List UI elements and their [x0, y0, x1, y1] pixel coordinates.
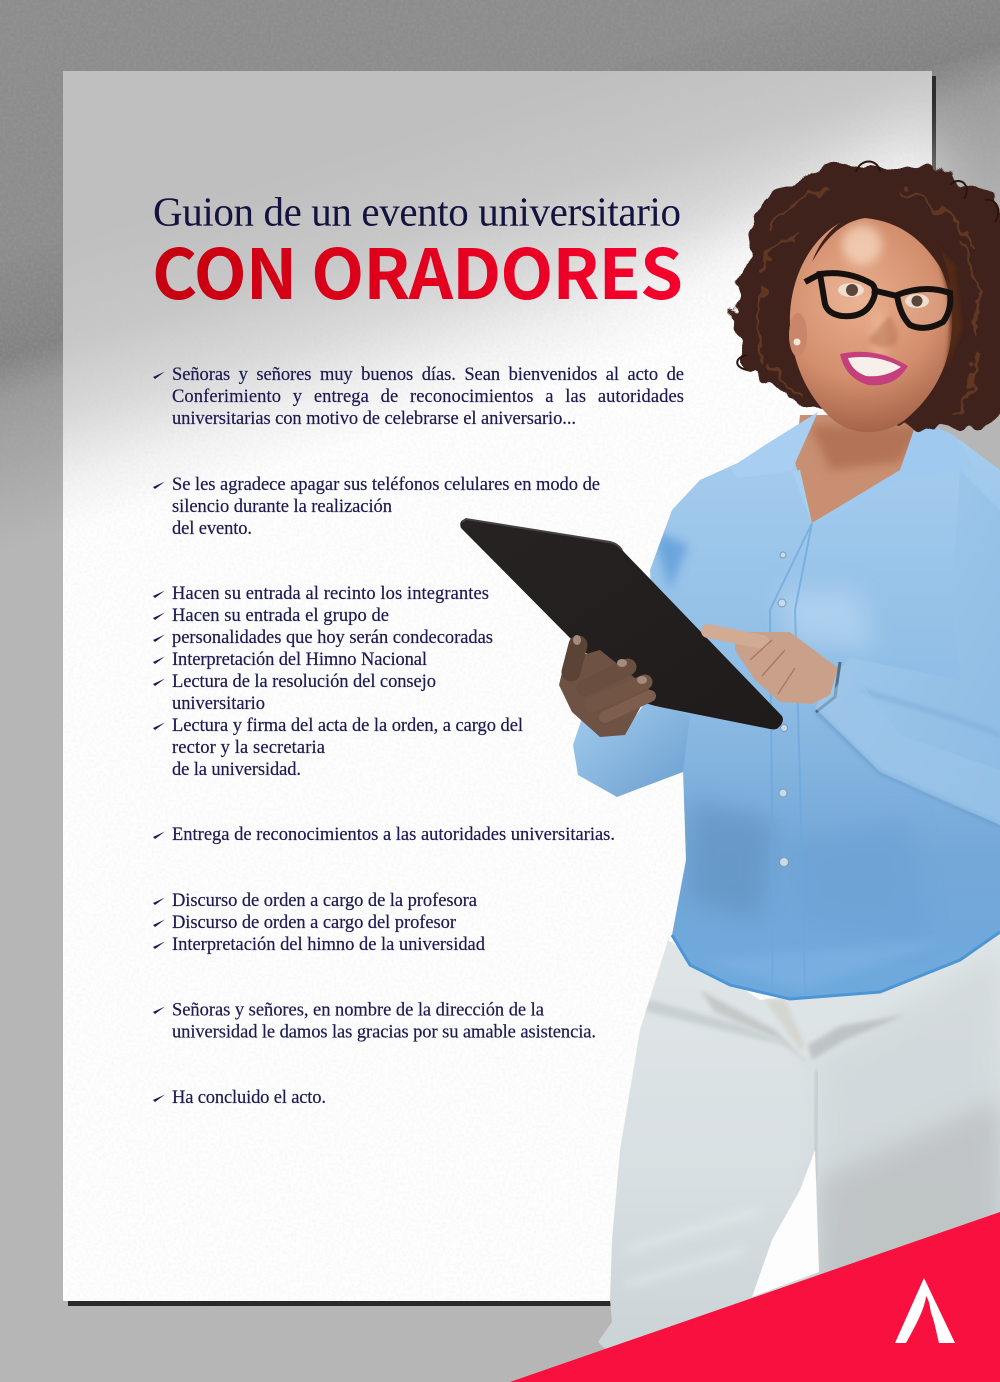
- text block: speeches: Interpretación del himno de la universidad: [172, 935, 486, 955]
- text block: closing: Ha concluido el acto.: [172, 1088, 326, 1108]
- text block: programme list: de la universidad.: [172, 760, 301, 780]
- neck: [795, 415, 925, 523]
- nose: [868, 315, 898, 348]
- text block: phones: del evento.: [172, 519, 252, 539]
- text block: speeches: Discurso de orden a cargo del profesor: [172, 913, 456, 933]
- heading line: subtitle: Guion de un evento universitario: [153, 188, 681, 234]
- text block: programme list: personalidades que hoy serán condecoradas: [172, 628, 493, 648]
- text block: welcome: Señoras y señores muy buenos días. Sean bienvenidos al acto de: [172, 365, 684, 385]
- text block: speeches: [153, 891, 486, 955]
- cuff detail: [816, 684, 1000, 825]
- heading: [152, 188, 683, 319]
- text block: programme list: [153, 584, 523, 780]
- shirt buttons: [778, 552, 788, 866]
- text block: programme list: Hacen su entrada el grupo de: [172, 606, 389, 626]
- hair: [730, 162, 1000, 430]
- text block: programme list: Hacen su entrada al recinto los integrantes: [172, 584, 489, 604]
- text block: phones: Se les agradece apagar sus teléfonos celulares en modo de: [172, 475, 600, 495]
- panel: paper sheet: [63, 71, 936, 1306]
- text block: programme list: Interpretación del Himno Nacional: [172, 650, 427, 670]
- trousers: [598, 930, 1000, 1382]
- text block: thanks: universidad le damos las gracias por su amable asistencia.: [172, 1022, 596, 1042]
- shirt collar: [737, 412, 957, 523]
- text block: speeches: Discurso de orden a cargo de la profesora: [172, 891, 477, 911]
- text block: phones: silencio durante la realización: [172, 497, 392, 517]
- right hand: [708, 631, 840, 712]
- left sleeve: [573, 703, 690, 797]
- text block: awards: Entrega de reconocimientos a las autoridades universitarias.: [172, 825, 615, 845]
- left hand: [559, 635, 650, 737]
- text block: thanks: [153, 1000, 596, 1042]
- text block: welcome: [153, 365, 684, 429]
- face: [789, 209, 962, 432]
- text block: phones: [153, 475, 600, 539]
- text block: thanks: Señoras y señores, en nombre de la dirección de la: [172, 1000, 544, 1020]
- text block: welcome: Conferimiento y entrega de reconocimientos a las autoridades: [172, 387, 684, 407]
- logo: [895, 1278, 955, 1343]
- text block: programme list: universitario: [172, 694, 265, 714]
- tablet: [460, 519, 783, 729]
- person: woman with tablet: [460, 162, 1000, 1382]
- text block: welcome: universitarias con motivo de celebrarse el aniversario...: [172, 409, 576, 429]
- eyes: [838, 283, 929, 308]
- mouth: [840, 352, 908, 385]
- text block: programme list: Lectura de la resolución del consejo: [172, 672, 436, 692]
- text block: programme list: rector y la secretaria: [172, 738, 325, 758]
- text block: programme list: Lectura y firma del acta de la orden, a cargo del: [172, 716, 523, 736]
- heading line: con oradores: CON ORADORES: [152, 219, 683, 319]
- shirt body: [650, 430, 1000, 999]
- glasses: [805, 273, 950, 328]
- brand corner triangle: [510, 1212, 1000, 1382]
- right arm sleeve: [814, 662, 1000, 826]
